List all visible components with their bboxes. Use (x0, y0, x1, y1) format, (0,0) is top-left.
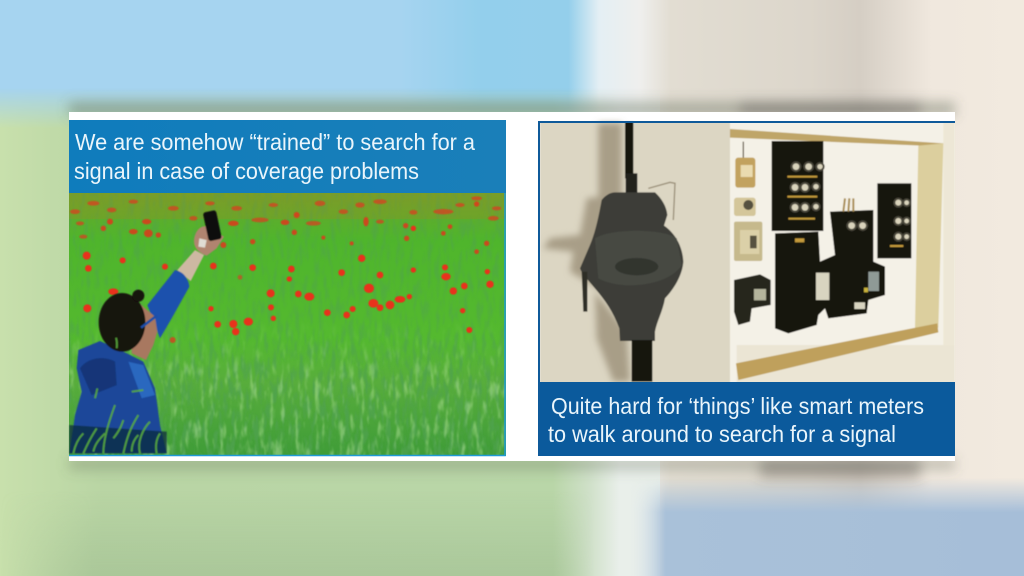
device shadow (543, 123, 630, 382)
left panel border (69, 193, 505, 456)
grass field photo (69, 193, 506, 456)
phone (203, 210, 222, 241)
wall photo (540, 122, 955, 383)
hair (99, 290, 145, 352)
hoodie (69, 341, 167, 453)
left panel: man searching for a signal in a poppy field (69, 120, 506, 456)
left caption text: signal in case of coverage problems (74, 158, 419, 184)
panel shadow (69, 102, 955, 478)
left caption text: We are somehow “trained” to search for a (75, 129, 475, 155)
right panel: old utility meters on a wall (539, 122, 955, 456)
right caption band (539, 382, 955, 456)
face (132, 303, 157, 360)
right caption text: Quite hard for ‘things’ like smart meters (551, 393, 924, 419)
left caption text (74, 129, 475, 184)
right caption text: to walk around to search for a signal (548, 421, 896, 447)
glasses (141, 316, 157, 328)
meter windows (816, 198, 879, 309)
white image card (69, 112, 955, 461)
recess frame (730, 129, 943, 380)
thin wire loop (648, 182, 675, 220)
black meter boards (772, 141, 911, 333)
red poppies (70, 196, 501, 343)
right caption text (548, 393, 924, 447)
small beige switches (734, 142, 771, 325)
foreground grass blades over the man (73, 338, 160, 453)
meter labels (787, 176, 903, 247)
wall (540, 122, 955, 383)
man holding up a phone (69, 210, 224, 453)
right panel border (539, 122, 955, 456)
meter terminals (791, 162, 910, 241)
left caption band (69, 120, 506, 193)
raised arm (147, 226, 224, 338)
junction box and cable (580, 122, 683, 382)
